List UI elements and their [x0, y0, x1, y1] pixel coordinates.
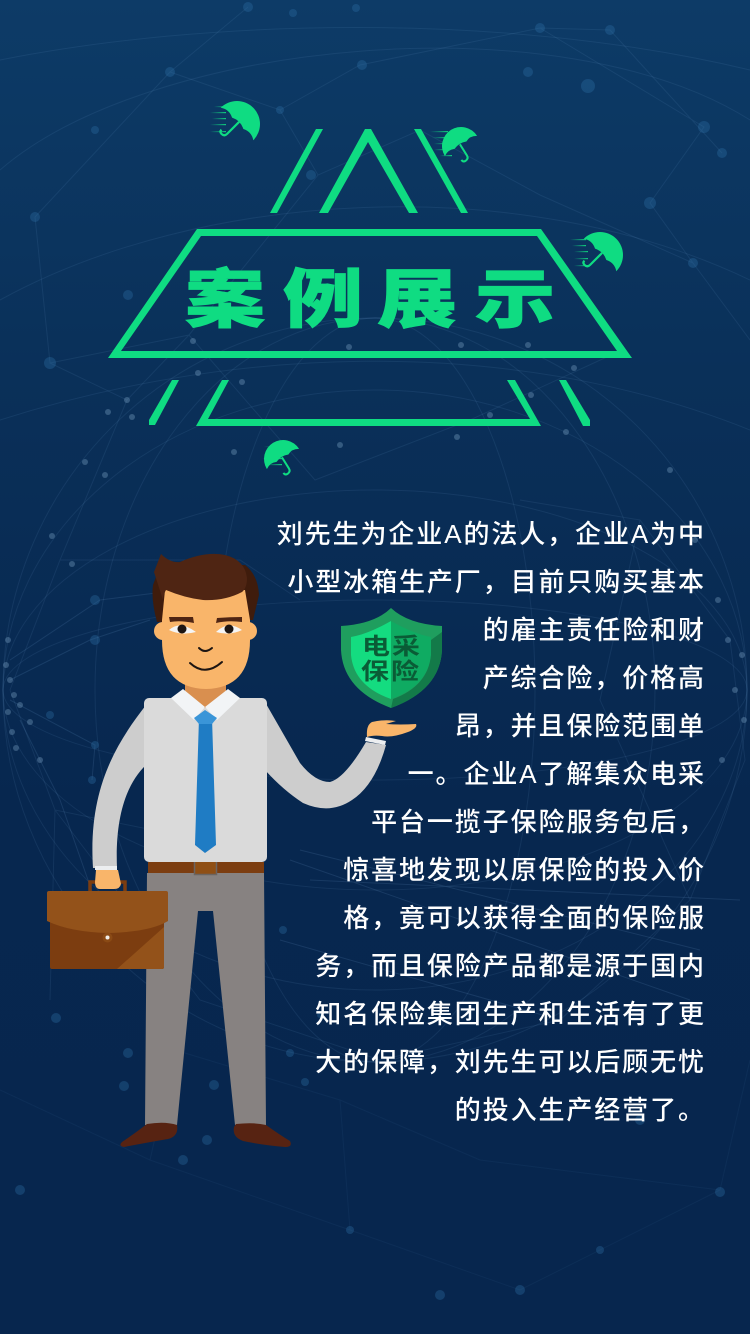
title trapezoid frame — [108, 229, 632, 358]
story text block: 平台一揽子保险服务包后， — [371, 807, 706, 837]
shoes — [120, 1123, 291, 1147]
hand holding shield — [367, 720, 416, 737]
story text block: 务，而且保险产品都是源于国内 — [315, 951, 706, 981]
title text: 展 — [377, 265, 457, 336]
icon: insurance shield — [341, 608, 442, 708]
left arm — [92, 705, 146, 868]
nose and mouth — [190, 648, 222, 670]
collar — [171, 689, 240, 720]
briefcase handle — [90, 882, 125, 892]
briefcase flap — [47, 891, 168, 933]
top left slash — [270, 129, 323, 213]
story text block: 刘先生为企业A的法人，企业A为中 — [277, 519, 706, 549]
illustration: businessman with briefcase — [47, 554, 416, 1147]
top center peak — [319, 129, 418, 213]
title graphic: chevrons and trapezoid frame — [108, 129, 632, 426]
shield text: 保 — [361, 658, 389, 684]
story text block: 大的保障，刘先生可以后顾无忧 — [315, 1047, 706, 1077]
title text: 例 — [283, 265, 363, 336]
shirt body — [144, 698, 267, 862]
cuff right — [365, 737, 386, 745]
briefcase clasp — [102, 932, 112, 942]
tie knot — [194, 710, 217, 724]
top right slash — [414, 129, 468, 213]
story text block: 格，竟可以获得全面的保险服 — [343, 903, 706, 933]
story text block — [277, 519, 706, 1125]
back hair — [152, 565, 259, 622]
briefcase body — [50, 915, 164, 969]
neck — [185, 680, 226, 708]
icon: umbrella bottom — [257, 433, 307, 482]
story text block: 昂，并且保险范围单 — [455, 711, 706, 741]
title text — [185, 265, 555, 336]
belt buckle — [194, 860, 216, 874]
left cuff — [95, 866, 117, 870]
right arm — [265, 702, 386, 808]
eyebrows — [169, 617, 242, 623]
front hair — [154, 554, 247, 600]
face — [162, 590, 250, 689]
shield text — [361, 633, 420, 684]
eyes — [169, 625, 242, 634]
story text block: 产综合险，价格高 — [483, 663, 706, 693]
bottom left slash — [149, 380, 179, 425]
icon: umbrella top right — [430, 120, 485, 169]
icon: umbrella top left — [208, 91, 270, 153]
story text block: 惊喜地发现以原保险的投入价 — [343, 855, 706, 885]
bottom right slash — [559, 380, 590, 426]
story text block: 一。企业A了解集众电采 — [408, 759, 706, 789]
bottom center bracket — [196, 380, 541, 426]
story text block: 的雇主责任险和财 — [483, 615, 706, 645]
briefcase fist — [95, 870, 121, 889]
briefcase corner highlight — [117, 927, 164, 969]
story text block: 的投入生产经营了。 — [455, 1095, 706, 1125]
belt — [148, 862, 264, 873]
story text block: 知名保险集团生产和生活有了更 — [315, 999, 706, 1029]
story text block: 小型冰箱生产厂，目前只购买基本 — [287, 567, 706, 597]
shield text: 险 — [391, 657, 419, 684]
trousers — [145, 873, 266, 1125]
shield text: 电 — [362, 633, 390, 659]
tie — [195, 718, 216, 853]
icon: umbrella right — [570, 222, 633, 284]
title text: 案 — [185, 265, 265, 336]
shield text: 采 — [392, 633, 420, 659]
ears — [154, 622, 257, 640]
title text: 示 — [475, 265, 555, 336]
